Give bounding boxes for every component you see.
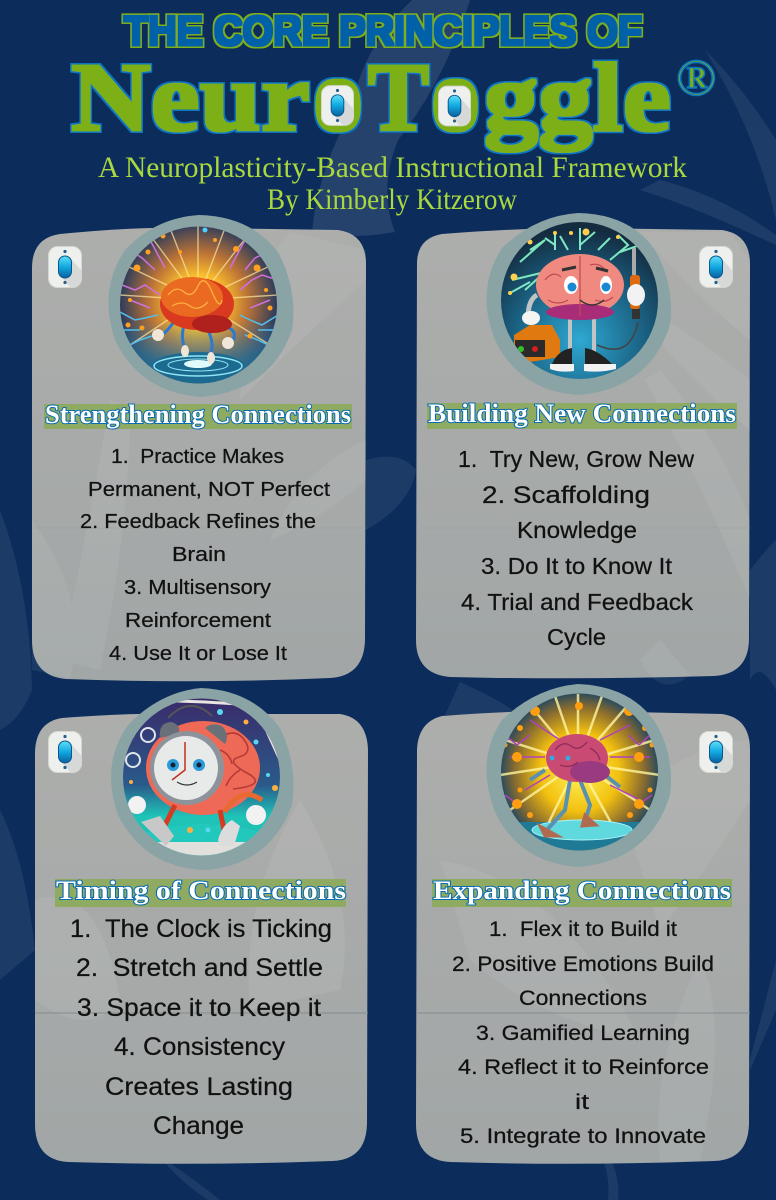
panel: building new connections [416, 213, 750, 685]
list 4: it [575, 1090, 589, 1114]
icon: toggle switch 1 [48, 246, 82, 288]
icon: toggle in second o [438, 86, 471, 126]
wordmark: o [313, 36, 363, 153]
icon: toggle switch 2 [700, 246, 732, 288]
panel 4 background [416, 711, 750, 1164]
wordmark: Neur [71, 44, 310, 152]
list 4: Connections [519, 986, 647, 1010]
list 1: 4. Use It or Lose It [109, 643, 287, 665]
list 3: Creates Lasting [105, 1073, 293, 1101]
illustration: walking brain with neurons [500, 693, 660, 852]
list 4: 3. Gamified Learning [476, 1021, 690, 1045]
panel: strengthening connections [32, 215, 366, 681]
illustration: brain with soldering iron [500, 222, 658, 380]
heading bar 1 [44, 404, 352, 429]
list 4: 1. Flex it to Build it [489, 917, 677, 941]
panel 2 background [416, 228, 750, 678]
registered mark: ® [676, 50, 716, 107]
list 1: 1. Practice Makes [111, 446, 284, 468]
list 1: Permanent, NOT Perfect [88, 479, 330, 501]
icon: toggle in first o [321, 86, 354, 125]
list 3: 2. Stretch and Settle [76, 954, 323, 982]
illustration: alarm clock brain [120, 698, 285, 858]
subtitle: A Neuroplasticity-Based Instructional Framework [98, 151, 687, 184]
panel 3 background [35, 714, 368, 1164]
list 1 [80, 446, 330, 665]
wordmark: o [431, 36, 480, 153]
icon: toggle switch 4 [700, 732, 732, 772]
list 4: 4. Reflect it to Reinforce [458, 1055, 709, 1079]
heading bar 2 [427, 403, 737, 429]
illustration: brain with sparks [118, 226, 280, 385]
wordmark: ggle [484, 44, 671, 152]
list 4 [452, 917, 714, 1148]
wordmark [71, 36, 671, 153]
list 1: 3. Multisensory [124, 577, 271, 599]
icon: toggle switch 3 [48, 732, 82, 772]
eyebrow title: THE CORE PRINCIPLES OF [124, 7, 642, 54]
heading bar 3 [55, 879, 346, 907]
list 2: 4. Trial and Feedback [461, 589, 694, 615]
list 2 [458, 446, 694, 650]
list 3: Change [153, 1112, 244, 1140]
wordmark: T [368, 44, 429, 152]
image halo 4 [486, 684, 671, 867]
list 1: Reinforcement [125, 610, 271, 632]
list 3: 1. The Clock is Ticking [70, 915, 332, 943]
list 2: 2. Scaffolding [482, 482, 650, 509]
list 2: Knowledge [517, 517, 637, 543]
title block [71, 7, 716, 216]
image halo 2 [486, 213, 671, 395]
list 3: 3. Space it to Keep it [77, 994, 321, 1022]
panel: expanding connections [416, 684, 750, 1164]
list 4: 2. Positive Emotions Build [452, 952, 714, 976]
panel: timing of connections [35, 688, 368, 1164]
image halo 3 [111, 688, 294, 870]
heading 1: Strengthening Connections [45, 400, 351, 429]
panel 1 background [32, 228, 366, 681]
heading bar 4 [432, 879, 732, 907]
author: By Kimberly Kitzerow [267, 183, 517, 216]
heading 3: Timing of Connections [56, 876, 346, 905]
list 4: 5. Integrate to Innovate [460, 1124, 706, 1148]
list 2: 3. Do It to Know It [481, 553, 673, 579]
list 2: Cycle [547, 624, 606, 650]
list 2: 1. Try New, Grow New [458, 446, 694, 472]
list 1: 2. Feedback Refines the [80, 511, 316, 533]
heading 4: Expanding Connections [433, 876, 731, 905]
list 1: Brain [172, 544, 226, 566]
heading 2: Building New Connections [428, 399, 736, 428]
list 3: 4. Consistency [114, 1033, 286, 1061]
list 3 [70, 915, 332, 1140]
image halo 1 [108, 215, 293, 397]
